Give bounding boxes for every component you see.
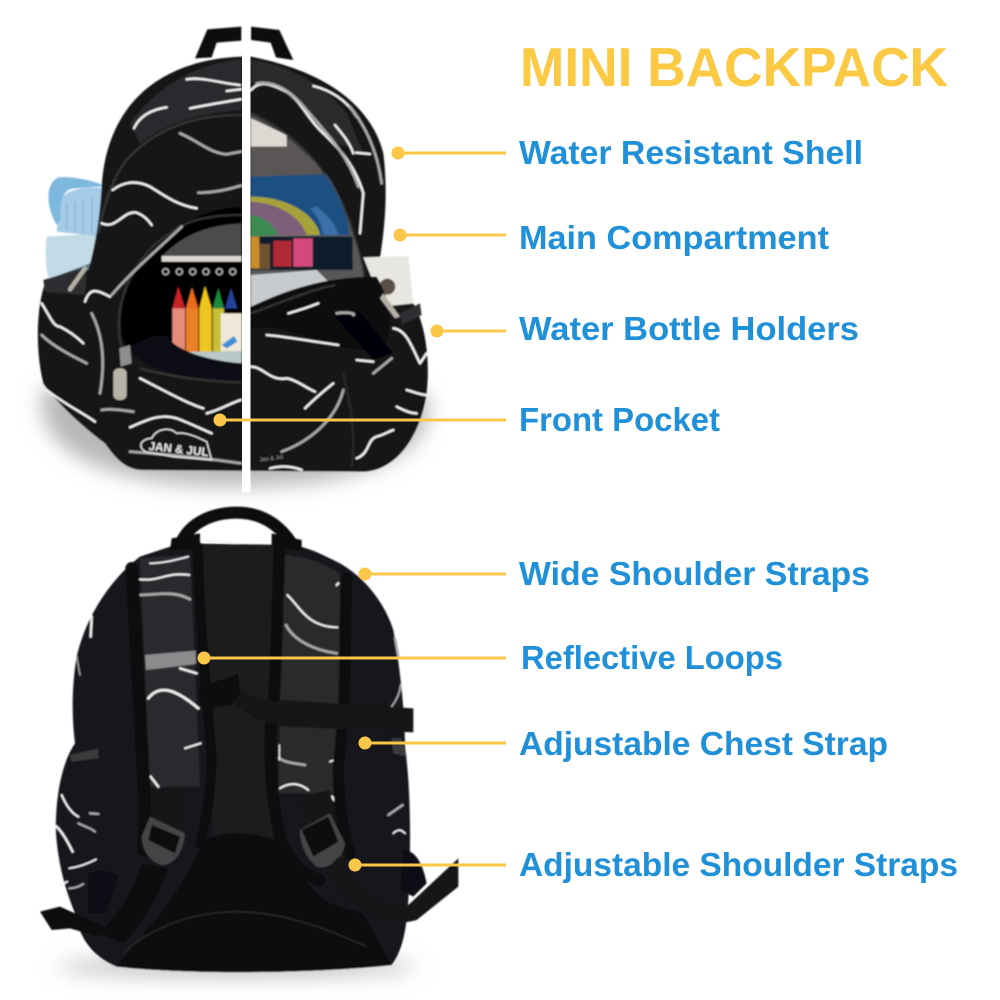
bottle pocket rims bbox=[43, 267, 87, 295]
callout: water bottle holders: Water Bottle Holders bbox=[519, 310, 859, 347]
main zipper arc bbox=[251, 113, 365, 280]
centre divider bbox=[242, 20, 250, 492]
front backpack photo bbox=[38, 27, 428, 487]
front flap on right half bbox=[251, 277, 389, 353]
markers bbox=[251, 237, 353, 270]
brand embroidery: JAN & JUL bbox=[148, 439, 209, 459]
upper bag lighter fabric bbox=[130, 59, 241, 143]
callout: front pocket: Front Pocket bbox=[519, 401, 720, 438]
reflective loop bbox=[145, 651, 196, 670]
bag silhouette bbox=[38, 57, 428, 472]
top handle bbox=[180, 513, 292, 545]
front pocket pouch bbox=[127, 336, 241, 383]
zipper pull bbox=[113, 345, 132, 400]
front pocket opening bbox=[121, 207, 242, 363]
side strap on right bbox=[332, 310, 393, 360]
right shoulder pad bbox=[278, 555, 340, 793]
callout: front pocket bbox=[214, 401, 720, 438]
tissue pack bbox=[363, 256, 413, 307]
spiral rings bbox=[163, 269, 236, 275]
callout: wide shoulder straps: Wide Shoulder Straps bbox=[519, 555, 870, 592]
pocket lower seam bbox=[343, 373, 353, 467]
side pocket right bbox=[388, 638, 407, 833]
side pocket left bbox=[57, 617, 98, 888]
chest strap and buckle bbox=[198, 673, 413, 732]
callout: reflective loops: Reflective Loops bbox=[521, 639, 783, 676]
silver pouch bbox=[251, 270, 330, 310]
callout: adjustable chest strap: Adjustable Chest Strap bbox=[519, 725, 888, 762]
main compartment opening bbox=[251, 115, 363, 310]
callout: adjustable shoulder straps: Adjustable Shoulder Straps bbox=[519, 846, 958, 883]
callout: main compartment: Main Compartment bbox=[519, 219, 829, 256]
callout: adjustable chest strap bbox=[358, 725, 888, 762]
left shoulder pad bbox=[140, 555, 200, 787]
back backpack photo bbox=[40, 513, 458, 977]
right shoulder strap webbing bbox=[270, 547, 350, 880]
right pad pattern bbox=[279, 583, 340, 807]
lower right strap and buckle bbox=[298, 790, 458, 922]
bag body bbox=[56, 543, 410, 972]
crayons bbox=[172, 286, 242, 353]
lower left strap and buckle bbox=[40, 788, 187, 943]
title: MINI BACKPACK bbox=[520, 36, 948, 98]
callout: main compartment bbox=[394, 219, 829, 256]
printed top strip bbox=[205, 541, 237, 543]
left upper zipper bbox=[98, 115, 241, 233]
callout: water resistant shell: Water Resistant Shell bbox=[519, 134, 863, 171]
small print label: Jan & Jul bbox=[259, 454, 283, 464]
water bottle bbox=[46, 177, 105, 285]
fabric wave pattern bbox=[42, 79, 427, 470]
top handle bbox=[195, 27, 293, 60]
left pad pattern bbox=[140, 557, 201, 787]
lumbar pad bbox=[117, 833, 392, 972]
left shoulder strap webbing bbox=[132, 547, 212, 850]
ground shadow bbox=[57, 957, 417, 977]
ground shadow bbox=[41, 387, 428, 487]
back mesh centre bbox=[203, 545, 275, 837]
brand embroidery bbox=[141, 429, 212, 460]
callout: reflective loops bbox=[198, 639, 783, 676]
rainbow folder bbox=[251, 197, 320, 237]
callout: wide shoulder straps bbox=[358, 555, 870, 592]
